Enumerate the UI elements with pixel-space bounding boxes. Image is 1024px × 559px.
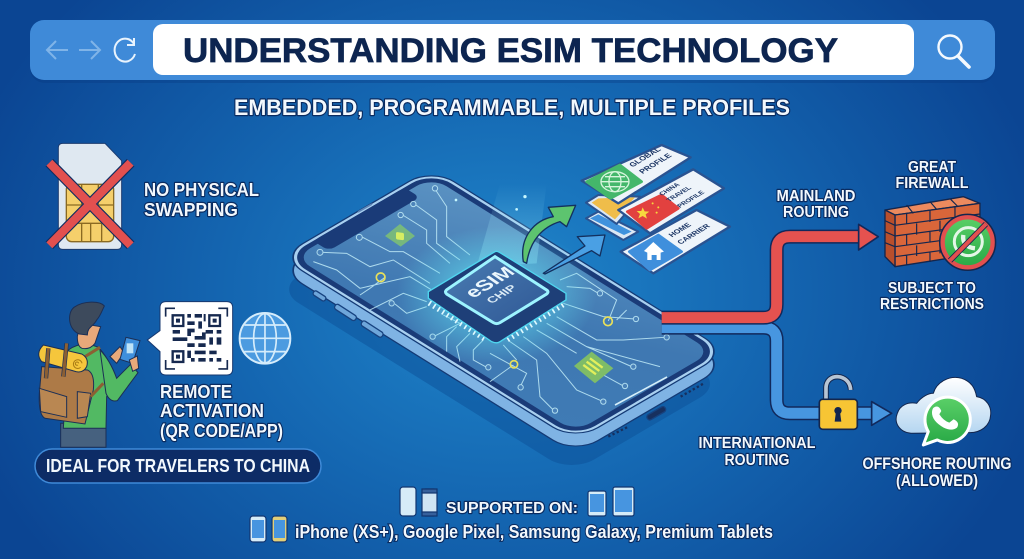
supported devices: [250, 487, 773, 542]
icon: globe: [240, 313, 290, 364]
browser address bar: [30, 20, 995, 83]
arrow: blue: [543, 235, 605, 274]
icon: magnifier: [938, 36, 969, 67]
arrow: green curved: [523, 205, 576, 263]
card: global profile: [582, 145, 691, 203]
icon: refresh: [115, 38, 135, 62]
esim chip: [428, 251, 566, 343]
label: subject to restrictions: SUBJECT TO: [888, 280, 976, 297]
phone body: [280, 168, 727, 441]
illustration: traveler with backpack: [39, 302, 140, 447]
label: remote activation: ACTIVATION: [160, 401, 264, 421]
icon: forward arrow: [79, 41, 100, 59]
icon: cloud with whatsapp: [896, 377, 991, 445]
card: china travel profile: PROFILE: [676, 190, 707, 209]
icon: crossed-out SIM card: [49, 143, 131, 249]
esim chip: CHIP: [483, 283, 520, 306]
label: mainland routing: [776, 188, 856, 221]
card: home carrier: HOME: [666, 221, 693, 238]
circuit traces: [313, 186, 669, 413]
label: subject to restrictions: [880, 280, 984, 313]
label: supported on: SUPPORTED ON:: [446, 500, 578, 517]
phone screen: [295, 177, 712, 432]
label: device list: iPhone (XS+), Google Pixel, Samsung Galaxy, Premium Tablets: [295, 522, 773, 542]
card: global profile: GLOBAL: [627, 146, 663, 168]
card: home carrier: [621, 210, 730, 273]
label: mainland routing: ROUTING: [783, 204, 849, 221]
label: international routing: [698, 435, 816, 469]
icon: phones row two: [250, 516, 287, 542]
title: UNDERSTANDING ESIM TECHNOLOGY: [183, 32, 838, 70]
card: home carrier: CARRIER: [675, 222, 713, 246]
green and yellow components: [376, 224, 613, 383]
label: remote activation: (QR CODE/APP): [160, 421, 283, 441]
card: china travel profile: [618, 169, 724, 233]
profile cards: [582, 145, 730, 273]
phone shadow: [276, 200, 723, 473]
light beam and glow: [397, 183, 597, 363]
label: no physical swapping: NO PHYSICAL: [144, 180, 259, 200]
icon: open padlock: [819, 377, 857, 429]
label: great firewall: GREAT: [908, 159, 956, 176]
label: international routing: ROUTING: [724, 452, 790, 469]
label: international routing: INTERNATIONAL: [698, 435, 816, 452]
label: great firewall: FIREWALL: [896, 175, 969, 192]
card: stacked blue: [586, 212, 638, 240]
home indicator: [615, 377, 667, 405]
side buttons and ports: [312, 290, 704, 437]
label: mainland routing: MAINLAND: [776, 188, 856, 205]
label: offshore routing: [862, 455, 1012, 490]
card: china travel profile: CHINA: [658, 182, 682, 197]
label: subject to restrictions: RESTRICTIONS: [880, 296, 984, 313]
icon: brick firewall: [885, 197, 980, 267]
icon: tablets: [588, 487, 634, 516]
subtitle: EMBEDDED, PROGRAMMABLE, MULTIPLE PROFILES: [234, 95, 790, 120]
label: no physical swapping: SWAPPING: [144, 200, 238, 220]
route: blue international: [662, 328, 892, 425]
card: global profile: PROFILE: [637, 152, 674, 175]
icon: QR code speech bubble: [147, 302, 233, 375]
icon: blocked whatsapp: [942, 216, 994, 268]
icon: back arrow: [47, 41, 68, 59]
phone side: [280, 181, 727, 454]
phone notch: [313, 188, 420, 251]
pill: ideal for travelers to china: IDEAL FOR TRAVELERS TO CHINA: [46, 456, 310, 476]
label: remote activation: [160, 382, 283, 441]
chip label: eSIM: [460, 264, 520, 301]
card: stacked yellow: [586, 195, 640, 224]
icon: phones: [400, 487, 437, 516]
label: remote activation: REMOTE: [160, 382, 232, 402]
label: no physical swapping: [144, 180, 259, 220]
pill: ideal for travelers to china: [35, 449, 321, 483]
label: offshore routing: (ALLOWED): [896, 472, 978, 490]
label: great firewall: [896, 159, 969, 192]
card: china travel profile: TRAVEL: [665, 185, 693, 203]
route: red mainland: [662, 224, 878, 318]
illustration: phone: [276, 168, 727, 473]
